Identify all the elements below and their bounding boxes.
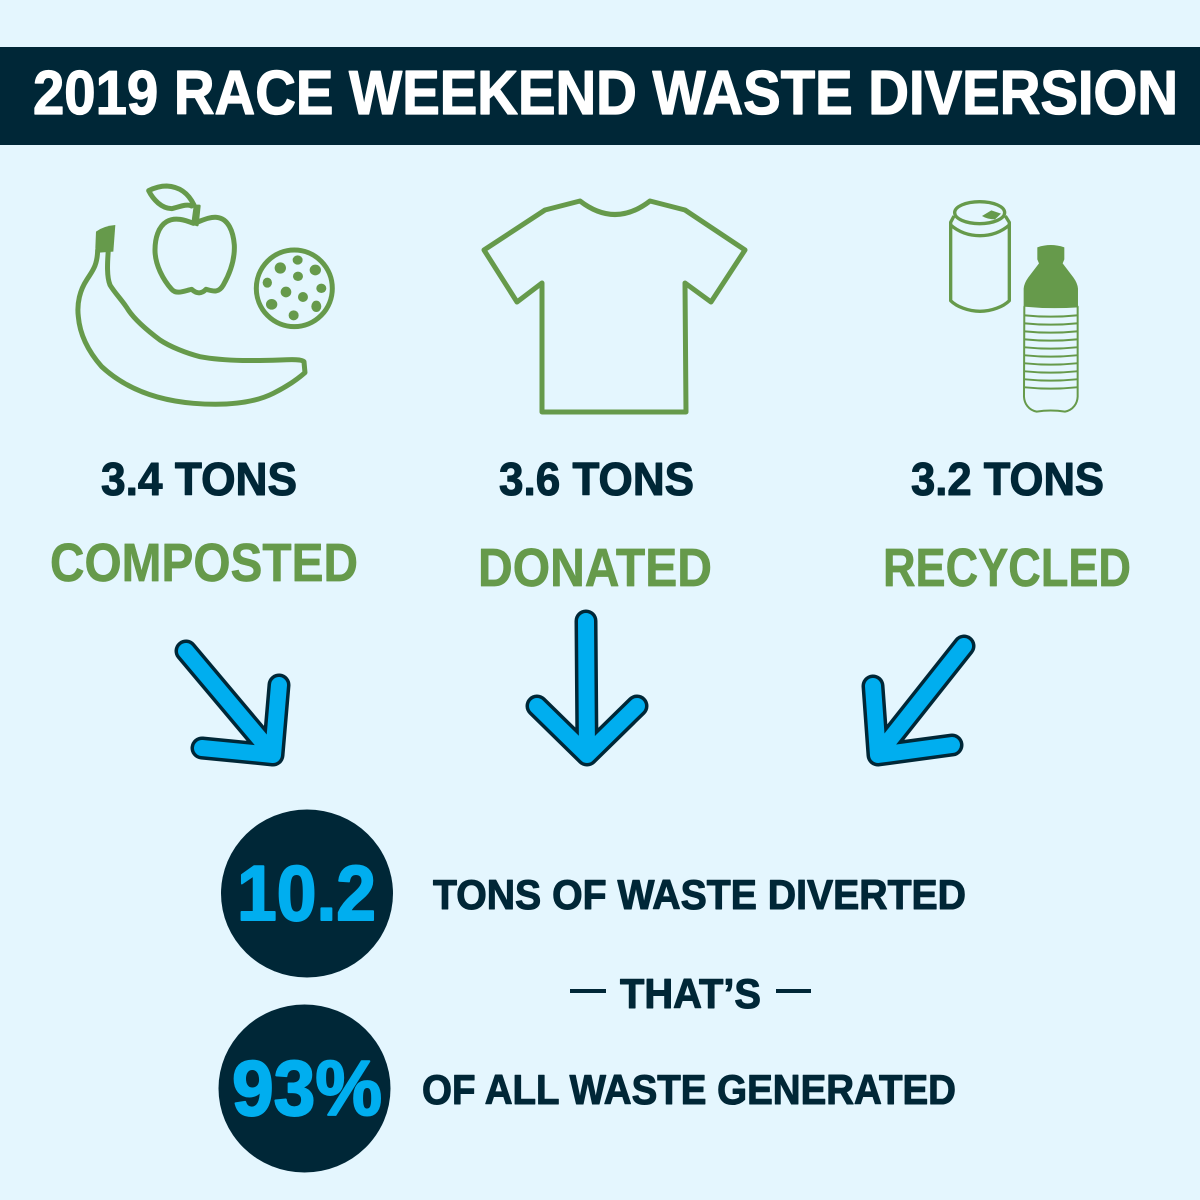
label: composted: COMPOSTED [50,533,358,593]
stat: 10.2 circle [221,810,393,978]
icon: can [951,202,1009,311]
icon: banana [78,225,305,404]
title banner [0,47,1200,145]
text: that's [570,970,811,1017]
label: recycled: RECYCLED [883,538,1131,598]
icon: bottle [1024,245,1078,412]
icon: t-shirt [484,201,745,412]
arrow: recycled to total [873,646,964,755]
stat: 10.2 circle: 10.2 [237,849,376,937]
text: of all waste generated: OF ALL WASTE GENERATED [422,1066,956,1113]
icon: food scraps [78,186,332,404]
arrow: composted to total [186,651,279,755]
column 1 amount: 3.4 TONS [101,453,297,505]
icon: cookie [256,250,332,327]
stat: 93% circle [218,1004,390,1172]
icon: can and bottle [951,202,1078,412]
arrow: donated to total [537,621,637,755]
text: that's: THAT’S [620,970,761,1017]
column 3 amount: 3.2 TONS [911,453,1104,505]
text: tons of waste diverted: TONS OF WASTE DIVERTED [433,871,966,918]
column 2 amount: 3.6 TONS [499,453,694,505]
stat: 93% circle: 93% [232,1044,382,1132]
label: donated: DONATED [478,538,712,598]
icon: apple [149,186,234,293]
